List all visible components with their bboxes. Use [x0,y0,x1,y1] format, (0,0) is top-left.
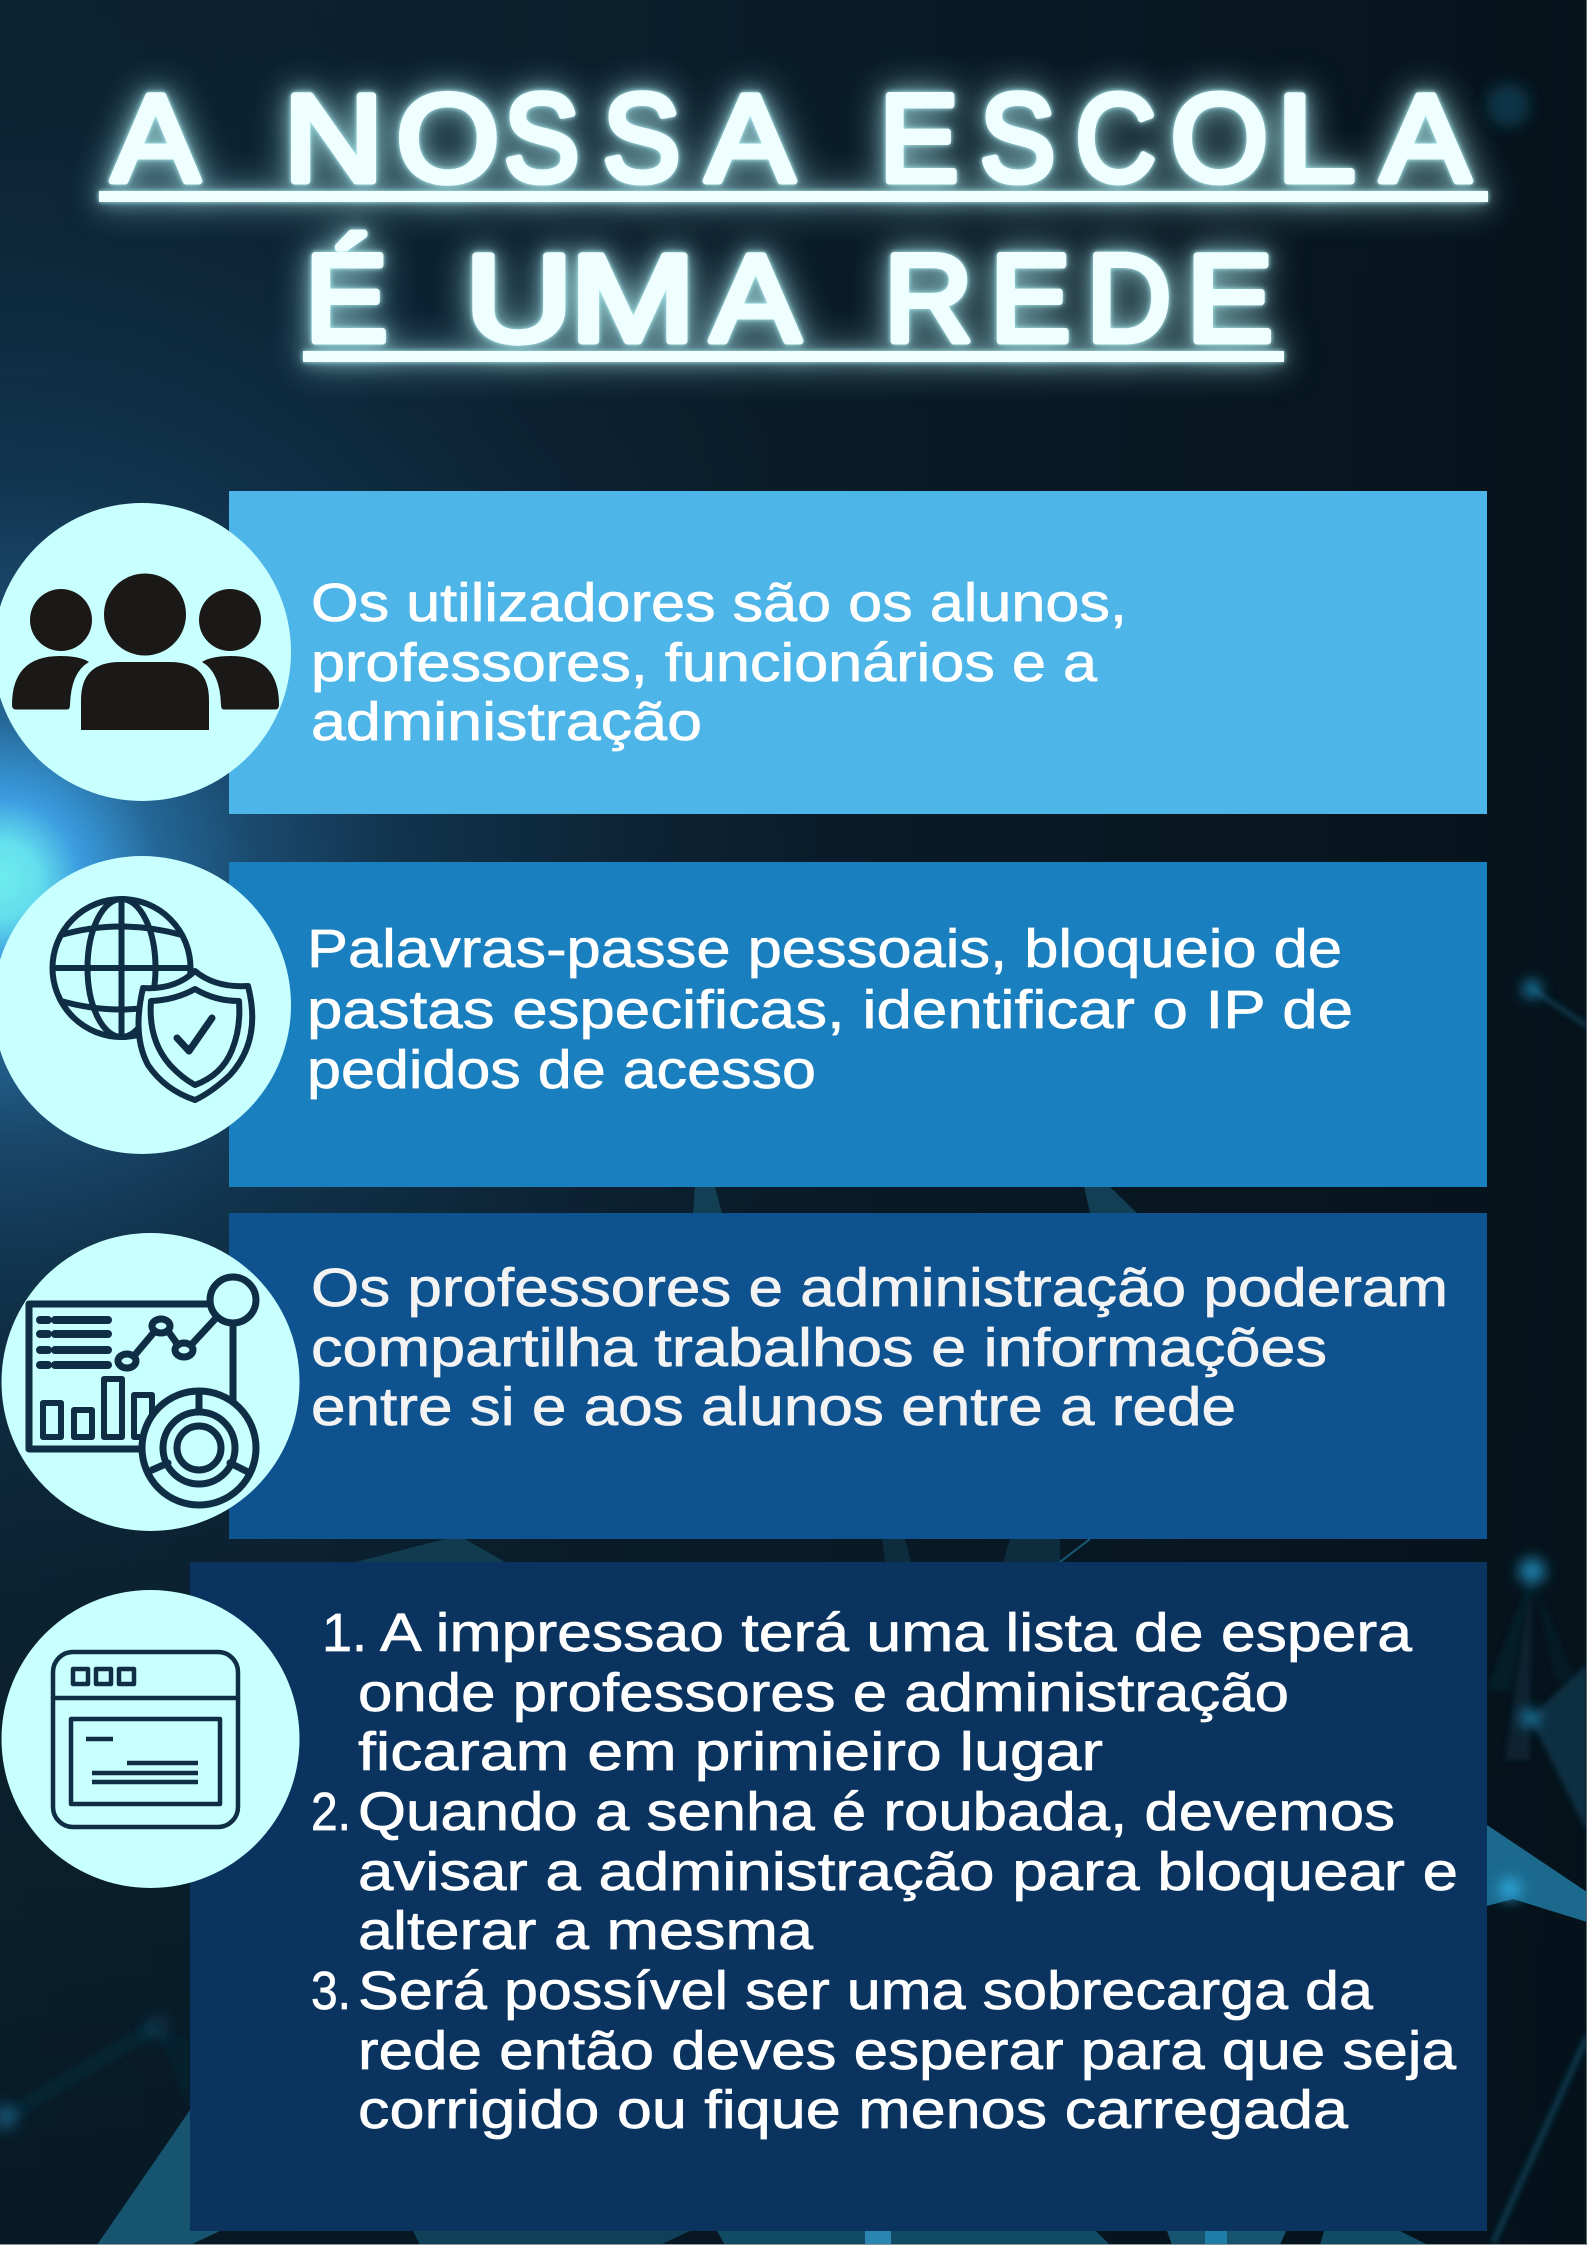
icon: globe and shield [0,856,291,1154]
text: users [311,573,1127,752]
title line 1: A [706,70,794,208]
text: security: Palavras-passe pessoais, bloqueio de [307,919,1342,979]
text: security [307,919,1353,1100]
title line 1: N [284,70,384,208]
title [99,70,1488,368]
text: numbered list: onde professores e administração [358,1663,1289,1723]
title line 1: S [980,70,1055,208]
panel: users [0,491,1487,814]
icon: browser window [2,1590,300,1888]
title line 1: S [603,70,680,208]
title line 1: A [1381,70,1470,208]
text: numbered list: ficaram em primieiro lugar [358,1722,1103,1782]
bottom strip of network texture [190,2231,1428,2245]
title line 1 [99,70,1488,208]
title line 1: O [1171,70,1268,208]
text: users: administração [311,692,702,752]
text: numbered list: A impressao terá uma lista de espera [380,1603,1413,1663]
text: security: pastas especificas, identificar o IP de [307,980,1353,1040]
title line 2: R [884,230,973,368]
title line 2 [303,230,1284,368]
title line 2: M [570,230,696,368]
title line 1: L [1277,70,1355,208]
text: users: professores, funcionários e a [311,633,1098,693]
title line 1: C [1076,70,1156,208]
text: sharing: compartilha trabalhos e informações [311,1318,1327,1378]
text: numbered list: rede então deves esperar para que seja [358,2021,1457,2081]
text: numbered list: avisar a administração para bloquear e [358,1842,1458,1902]
title line 2: É [305,230,388,368]
text: numbered list: 3. [311,1961,351,2021]
text: numbered list: 2. [311,1782,351,1842]
title line 2: U [465,230,573,368]
text: numbered list: Quando a senha é roubada, devemos [358,1782,1395,1842]
text: sharing [311,1258,1448,1437]
panel: sharing [2,1213,1487,1539]
text: users: Os utilizadores são os alunos, [311,573,1127,633]
text: security: pedidos de acesso [307,1040,816,1100]
text: numbered list: corrigido ou fique menos carregada [358,2080,1349,2140]
text: numbered list: alterar a mesma [358,1901,814,1961]
title line 2: A [711,230,800,368]
panel: problems list [2,1562,1487,2231]
text: sharing: Os professores e administração poderam [311,1258,1448,1318]
title line 2: E [1187,230,1273,368]
title line 2: D [1087,230,1171,368]
title line 2: E [990,230,1070,368]
panel: security [0,856,1487,1187]
text: numbered list: Será possível ser uma sobrecarga da [358,1961,1374,2021]
text: numbered list: 1. [322,1603,367,1663]
text: sharing: entre si e aos alunos entre a rede [311,1377,1236,1437]
icon: data dashboard [2,1233,300,1531]
icon: users [0,503,291,801]
text: numbered list [311,1603,1458,2140]
title line 1: S [504,70,579,208]
title line 1: O [396,70,499,208]
title line 1: A [112,70,199,208]
title line 1: E [880,70,958,208]
